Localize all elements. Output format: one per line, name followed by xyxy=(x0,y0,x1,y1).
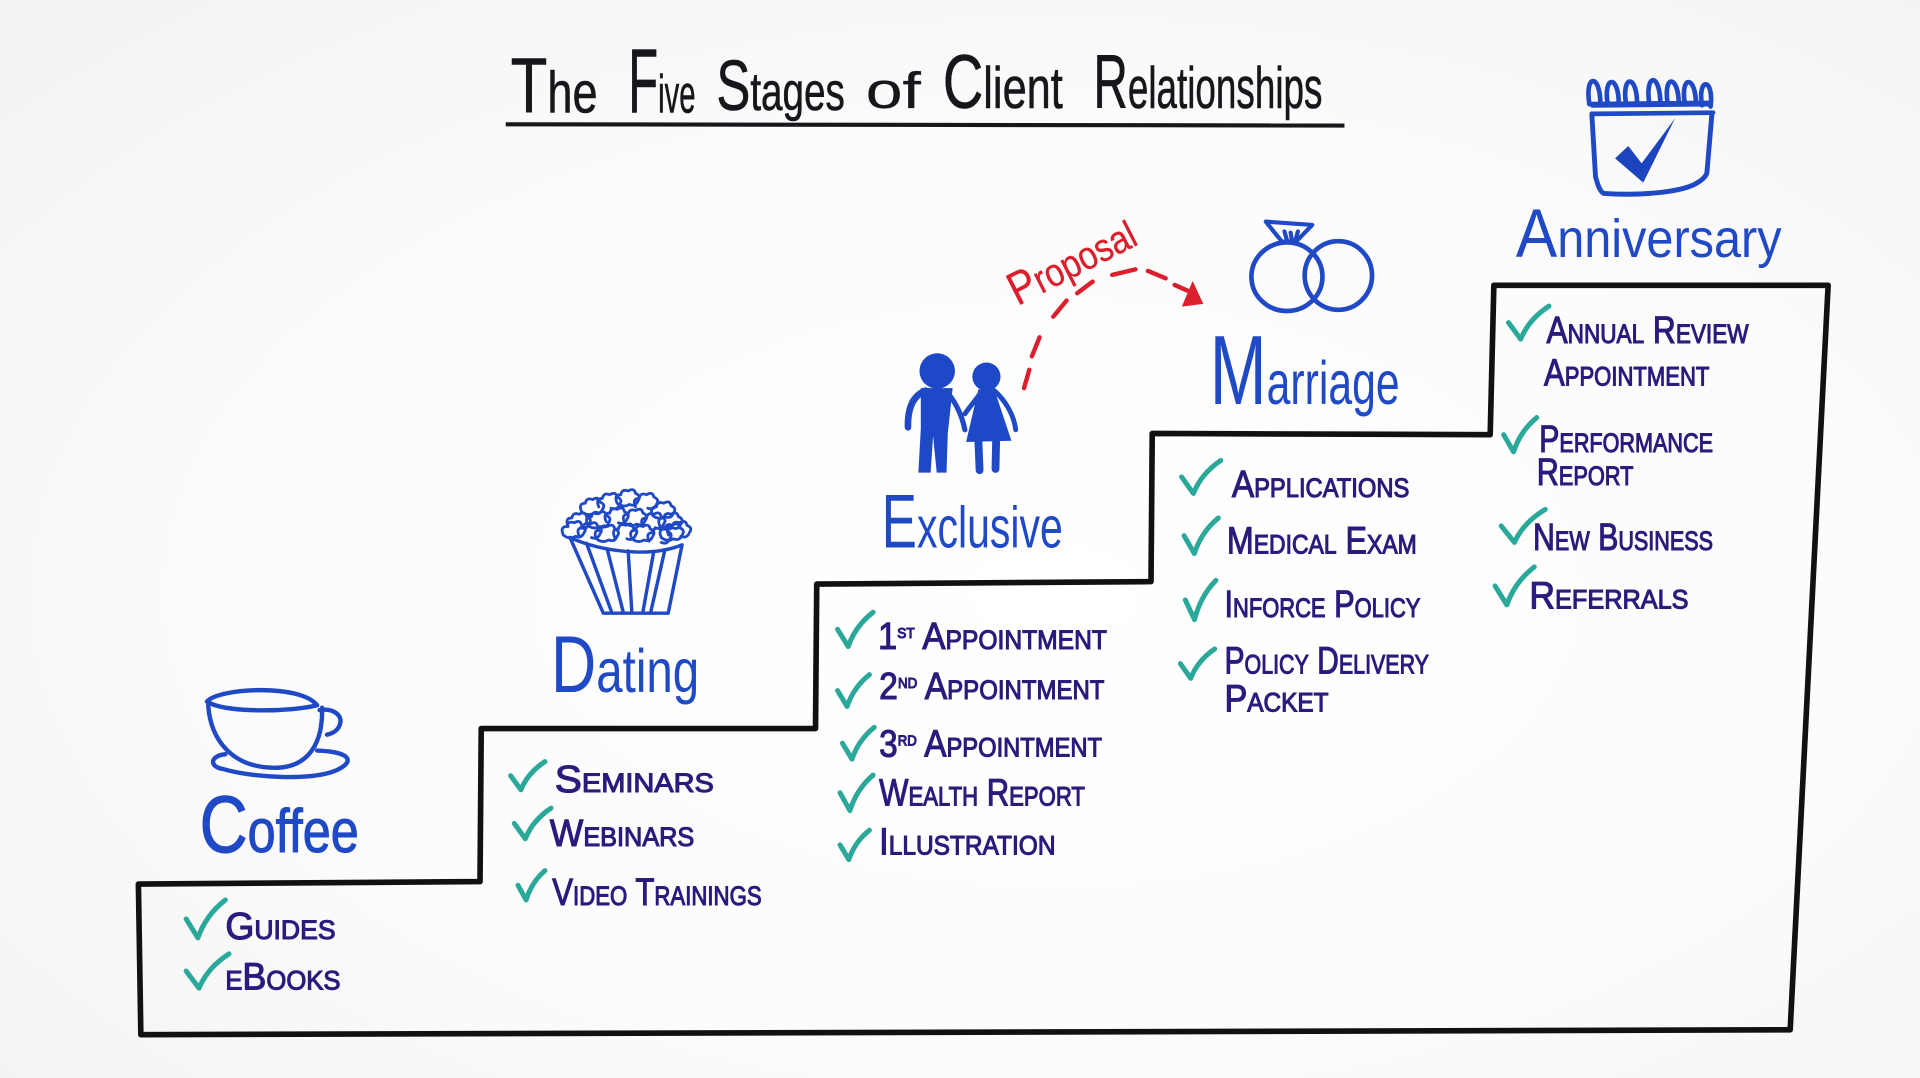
list item: Wealth Report: Wealth Report xyxy=(879,773,1085,815)
panel: exclusive stage xyxy=(838,353,1107,864)
label: Proposal: Proposal xyxy=(998,206,1144,315)
title: of xyxy=(866,61,922,119)
list item: Guides: Guides xyxy=(225,906,336,948)
title: Stages xyxy=(716,47,845,126)
list item: 1st Appointment: st xyxy=(897,620,915,643)
panel: marriage stage xyxy=(1180,222,1429,720)
list item: Guides xyxy=(186,900,336,948)
heading: Exclusive: Exclusive xyxy=(882,479,1063,564)
title underline xyxy=(506,124,1344,126)
list item: Annual Review Appointment: Appointment xyxy=(1544,353,1709,395)
title: Relationships xyxy=(1093,40,1322,125)
list item: Annual Review Appointment xyxy=(1509,306,1749,395)
list item: 3rd Appointment xyxy=(842,724,1102,766)
list item: Webinars xyxy=(514,808,694,855)
list item: Applications: Applications xyxy=(1232,464,1409,506)
title: Client xyxy=(943,40,1063,125)
list item: 3rd Appointment: Appointment xyxy=(917,724,1102,766)
list item: Performance Report xyxy=(1504,418,1713,494)
list item: Policy Delivery Packet: Packet xyxy=(1224,678,1329,720)
heading: Marriage: Marriage xyxy=(1210,315,1400,425)
list item: 2nd Appointment: 2 xyxy=(879,666,900,708)
list item: Referrals xyxy=(1495,567,1689,618)
icon: popcorn xyxy=(562,490,691,613)
list item: 1st Appointment: Appointment xyxy=(915,616,1107,658)
panel: anniversary stage xyxy=(1495,80,1782,618)
icon: couple holding hands xyxy=(908,353,1016,473)
list item: Policy Delivery Packet: Policy Delivery xyxy=(1224,640,1429,682)
title: Five xyxy=(628,32,696,133)
list item: Illustration: Illustration xyxy=(879,822,1056,864)
list item: Policy Delivery Packet xyxy=(1180,640,1429,720)
list item: New Business xyxy=(1501,509,1713,559)
panel: coffee stage xyxy=(186,690,359,998)
list item: Applications xyxy=(1182,460,1409,506)
staircase outline xyxy=(138,285,1828,1035)
list item: New Business: New Business xyxy=(1533,517,1713,559)
heading: Dating: Dating xyxy=(551,620,699,710)
list item: Referrals: Referrals xyxy=(1529,576,1689,618)
panel: dating stage xyxy=(511,490,762,914)
icon: calendar with check xyxy=(1588,80,1713,194)
list item: Medical Exam xyxy=(1184,518,1417,562)
title xyxy=(511,32,1322,133)
icon: wedding rings xyxy=(1251,222,1372,311)
list item: Webinars: Webinars xyxy=(550,813,694,855)
icon: coffee cup xyxy=(207,690,348,777)
list item: Inforce Policy: Inforce Policy xyxy=(1224,584,1420,626)
heading: Anniversary: Anniversary xyxy=(1516,195,1782,272)
heading: Coffee: Coffee xyxy=(200,780,359,870)
list item: Performance Report: Performance xyxy=(1539,419,1713,461)
list item: 2nd Appointment xyxy=(838,666,1104,708)
list item: 3rd Appointment: rd xyxy=(898,728,917,751)
list item: Annual Review Appointment: Annual Review xyxy=(1547,310,1749,352)
list item: Medical Exam: Medical Exam xyxy=(1227,520,1417,562)
list item: 1st Appointment: 1 xyxy=(878,616,899,658)
list item: eBooks xyxy=(186,954,340,998)
woman xyxy=(965,363,1016,470)
list item: 1st Appointment xyxy=(838,612,1107,658)
title: The xyxy=(511,42,598,130)
list item: Video Trainings: Video Trainings xyxy=(552,872,762,914)
list item: 2nd Appointment: Appointment xyxy=(917,666,1104,708)
list item: Seminars: Seminars xyxy=(555,759,714,801)
list item: eBooks: eBooks xyxy=(225,956,340,998)
list item: Performance Report: Report xyxy=(1537,452,1633,494)
list item: 2nd Appointment: nd xyxy=(898,670,917,693)
list item: Inforce Policy xyxy=(1185,580,1420,626)
man xyxy=(908,353,965,473)
list item: 3rd Appointment: 3 xyxy=(879,724,900,766)
arrow: proposal dashed arrow xyxy=(1024,269,1203,388)
